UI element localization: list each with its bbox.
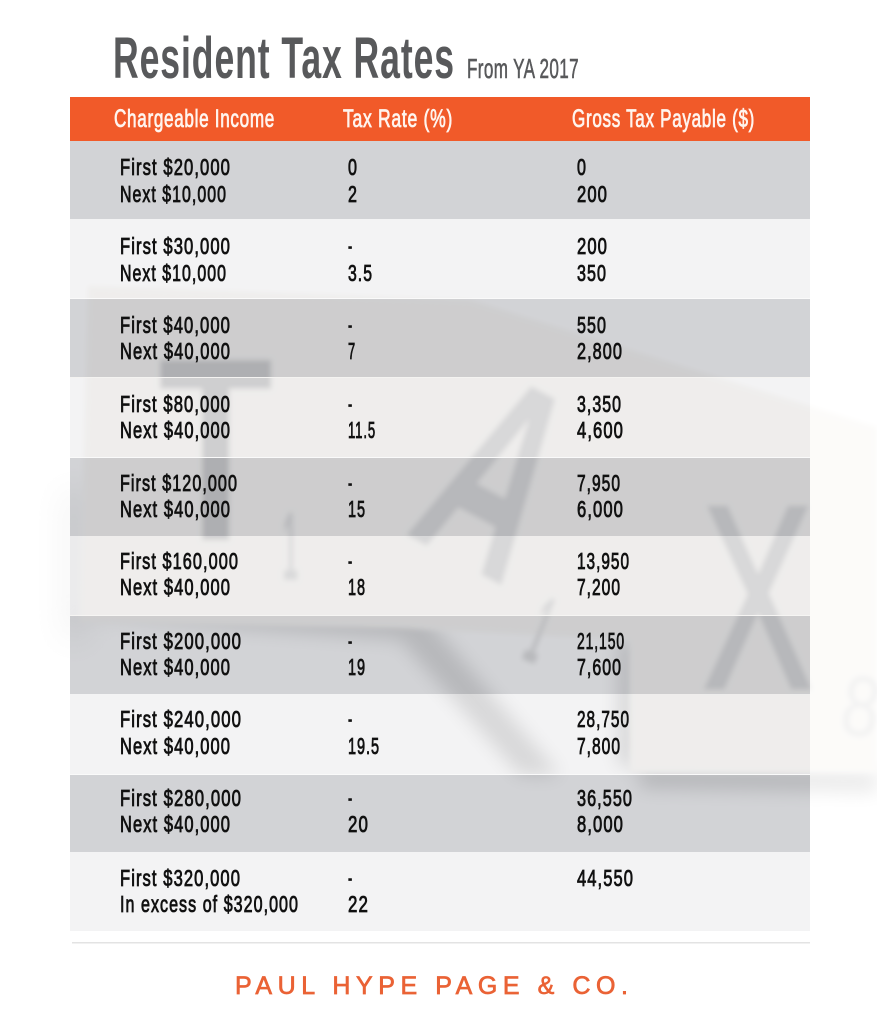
row 2: Next $10,000: [120, 260, 227, 286]
row 9: -: [348, 785, 353, 811]
row 4: -: [348, 391, 353, 417]
row 7: 21,150: [577, 628, 625, 654]
row 8: 28,750: [577, 706, 630, 732]
row 7: First $200,000: [120, 628, 242, 654]
row 5: [70, 458, 810, 536]
row 5: 6,000: [577, 496, 624, 522]
row 2: First $30,000: [120, 233, 231, 259]
header: tax rate: Tax Rate (%): [343, 105, 453, 133]
row 4: Next $40,000: [120, 417, 231, 443]
row 6: -: [348, 548, 353, 574]
row 10: 22: [348, 891, 369, 917]
row 2: 3.5: [348, 260, 373, 286]
row 1: 2: [348, 181, 358, 207]
row 1: Next $10,000: [120, 181, 227, 207]
photo letter T: T: [158, 304, 273, 596]
row 8: 19.5: [348, 733, 380, 759]
row 5: Next $40,000: [120, 496, 231, 522]
row 6: 18: [348, 574, 366, 600]
row 3: 7: [348, 338, 356, 364]
row 3: First $40,000: [120, 312, 231, 338]
row 9: [70, 775, 810, 852]
row 4: 4,600: [577, 417, 624, 443]
subtitle: From YA 2017: [467, 53, 579, 84]
row 6: Next $40,000: [120, 574, 231, 600]
row 4: First $80,000: [120, 391, 231, 417]
row 1: 200: [577, 181, 608, 207]
row 2: [70, 219, 810, 298]
background photo: blurred TAX tiles: [60, 286, 877, 792]
row 8: [70, 694, 810, 774]
row 3: 550: [577, 312, 607, 338]
row 1: 0: [348, 154, 358, 180]
row 7: Next $40,000: [120, 654, 231, 680]
row 9: First $280,000: [120, 785, 242, 811]
row 1: 0: [577, 154, 587, 180]
row 9: Next $40,000: [120, 811, 231, 837]
photo numeral 1 near T: 1: [282, 493, 298, 602]
row 6: 7,200: [577, 574, 621, 600]
row 1: [70, 141, 810, 219]
row 6: 13,950: [577, 548, 630, 574]
row 5: 15: [348, 496, 366, 522]
row 10: [70, 852, 810, 931]
row 2: 350: [577, 260, 607, 286]
header: gross tax payable: Gross Tax Payable ($): [572, 105, 755, 133]
row 5: 7,950: [577, 470, 621, 496]
row 3: [70, 299, 810, 377]
row 3: Next $40,000: [120, 338, 231, 364]
row 5: First $120,000: [120, 470, 238, 496]
row 4: 11.5: [348, 417, 376, 443]
photo numeral 1 near A: 1: [512, 578, 568, 684]
header: chargeable income: Chargeable Income: [114, 105, 275, 133]
row 9: 8,000: [577, 811, 624, 837]
row 5: -: [348, 470, 353, 496]
row 9: 20: [348, 811, 369, 837]
row 7: 7,600: [577, 654, 622, 680]
row 6: [70, 536, 810, 615]
row 2: -: [348, 233, 353, 259]
row 8: First $240,000: [120, 706, 242, 732]
row 7: -: [348, 628, 353, 654]
title: Resident Tax Rates: [113, 26, 455, 91]
row 6: First $160,000: [120, 548, 239, 574]
footer brand: PAUL HYPE PAGE & CO.: [235, 972, 628, 1000]
row 8: Next $40,000: [120, 733, 231, 759]
row 4: [70, 378, 810, 457]
row 7: 19: [348, 654, 366, 680]
row 8: -: [348, 706, 353, 732]
row 8: 7,800: [577, 733, 621, 759]
table header: [70, 97, 810, 141]
photo letter A: A: [375, 313, 622, 639]
row 10: 44,550: [577, 865, 634, 891]
row 7: [70, 616, 810, 694]
row 10: -: [348, 865, 353, 891]
row 9: 36,550: [577, 785, 633, 811]
row 10: First $320,000: [120, 865, 241, 891]
row 2: 200: [577, 233, 608, 259]
row 3: 2,800: [577, 338, 623, 364]
row 4: 3,350: [577, 391, 622, 417]
row 10: In excess of $320,000: [120, 891, 299, 917]
row 3: -: [348, 312, 353, 338]
photo letter X: X: [703, 452, 812, 743]
row 1: First $20,000: [120, 154, 231, 180]
